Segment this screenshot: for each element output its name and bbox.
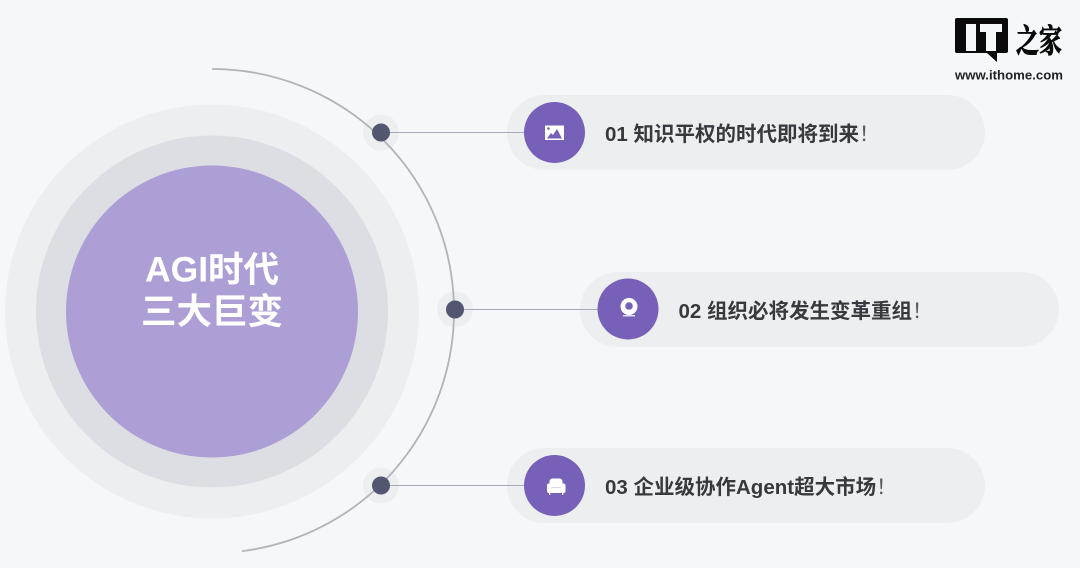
label 02: 02 组织必将发生变革重组！ bbox=[678, 299, 932, 323]
connector node 03 bbox=[372, 476, 525, 494]
item 02 bbox=[446, 272, 1059, 347]
logo url: www.ithome.com bbox=[954, 68, 1063, 82]
logo speech box bbox=[955, 18, 1008, 62]
pill 03 bbox=[507, 448, 985, 523]
icon: image bbox=[524, 102, 585, 163]
concentric circles: AGI core bbox=[5, 104, 419, 518]
icon: sofa bbox=[524, 455, 585, 516]
label 01: 01 知识平权的时代即将到来！ bbox=[605, 123, 880, 146]
icon: webcam bbox=[598, 278, 658, 340]
title: AGI时代三大巨变 bbox=[141, 250, 283, 332]
logo letters bbox=[966, 24, 1002, 51]
connector node 01 bbox=[372, 124, 525, 142]
pill 01 bbox=[507, 95, 985, 170]
label 03: 03 企业级协作Agent超大市场！ bbox=[605, 475, 897, 499]
title: AGI时代三大巨变: 三大巨变 bbox=[141, 292, 283, 332]
title: AGI时代三大巨变: AGI时代 bbox=[145, 250, 279, 290]
connector halos bbox=[363, 114, 473, 504]
item 01 bbox=[372, 95, 985, 170]
outer arc bbox=[212, 69, 454, 551]
logo calligraphy: 之家 bbox=[1016, 16, 1062, 62]
connector node 02 bbox=[446, 300, 599, 318]
pill 02 bbox=[580, 272, 1059, 347]
item 03 bbox=[372, 448, 985, 523]
logo: IT之家 bbox=[954, 16, 1063, 83]
